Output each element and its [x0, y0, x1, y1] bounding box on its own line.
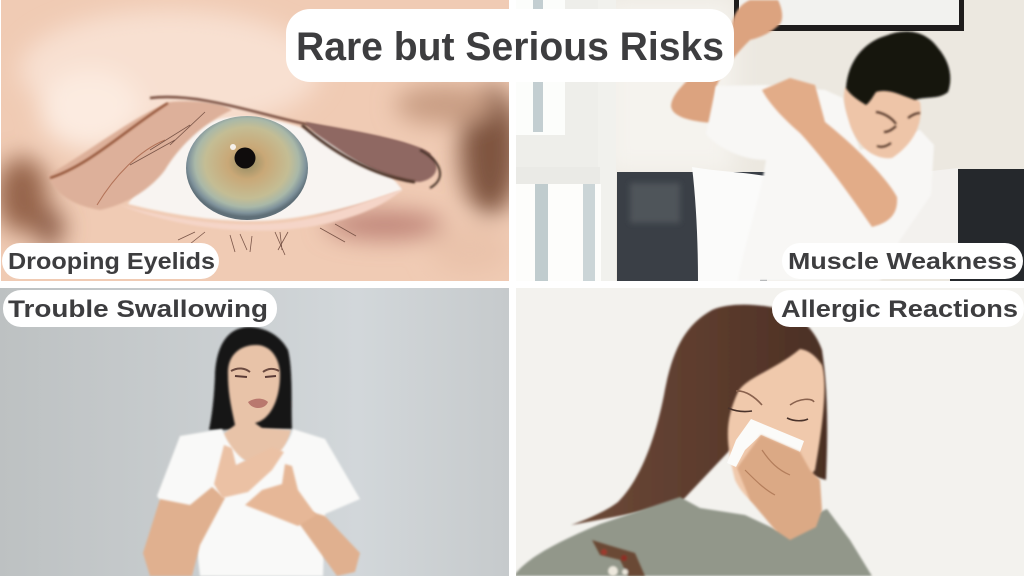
panel: muscle weakness photo: [516, 0, 1024, 285]
man's facial features: [876, 112, 920, 147]
closed eyes: [728, 391, 814, 421]
man's hand and forearm: [762, 78, 897, 227]
woman's hair: [209, 327, 292, 430]
iris: [186, 116, 308, 220]
woman's face: [728, 349, 824, 510]
woman's hand on chest, upper: [214, 445, 284, 498]
window: [516, 0, 616, 285]
sclera: [128, 117, 402, 221]
woman's long hair: [571, 305, 827, 525]
face features: [231, 368, 279, 408]
flower embroidery: [592, 540, 645, 576]
label: allergic reactions: [772, 290, 1024, 327]
title pill: [286, 9, 734, 82]
wall light: [616, 3, 732, 172]
label: allergic reactions: Allergic Reactions: [781, 296, 1018, 323]
lashes: [130, 112, 356, 255]
tissue: [727, 419, 804, 467]
label: trouble swallowing: [3, 290, 277, 327]
panel: allergic reactions photo: [514, 288, 1024, 576]
hand over nose: [737, 435, 822, 540]
headboard: [617, 169, 1024, 281]
panel: trouble swallowing photo: [0, 288, 510, 576]
label: muscle weakness: [782, 243, 1023, 279]
woman's hand on chest, lower: [245, 464, 316, 526]
drooping left lid fold: [48, 101, 232, 210]
man's white shirt: [706, 85, 934, 281]
lower lid rim: [120, 190, 402, 231]
right lid hood: [305, 122, 436, 182]
panel: drooping eyelids photo: [0, 0, 520, 285]
man's raised arm: [671, 0, 782, 123]
pupil: [234, 148, 256, 168]
woman's white T-shirt: [157, 429, 360, 576]
pillows: [692, 167, 958, 281]
woman's arms: [143, 487, 225, 576]
title: Rare but Serious Risks: [296, 25, 724, 69]
label: trouble swallowing: Trouble Swallowing: [8, 296, 268, 323]
man's hair: [846, 32, 950, 105]
label: drooping eyelids: [2, 243, 219, 279]
wall picture frame: [734, 0, 964, 31]
label: drooping eyelids: Drooping Eyelids: [8, 248, 215, 274]
sweater: [514, 497, 872, 576]
label: muscle weakness: Muscle Weakness: [788, 248, 1017, 274]
woman's neck and face: [222, 345, 291, 470]
man's neck and face: [844, 85, 921, 158]
